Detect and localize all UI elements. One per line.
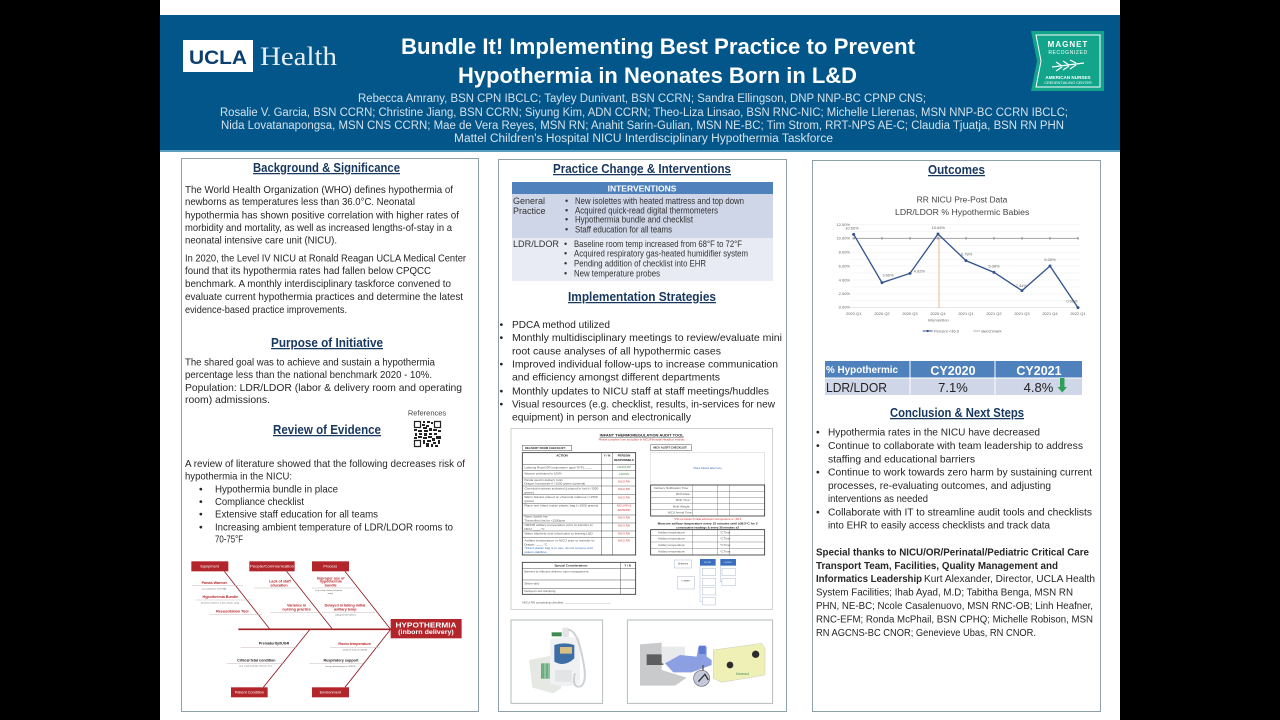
special considerations table: NICU RN completing checklist: ___________________________ — [522, 601, 611, 605]
header banner — [160, 15, 1120, 152]
chart legend: Percent <36.0 — [934, 328, 960, 333]
benchmark series — [853, 237, 1079, 239]
text: special thanks: PHN, NE-BC; Ncole Casalenuovo, MSN RNC-OB; Linh Heafner, — [816, 600, 1093, 612]
special considerations table: Delayed cord clamping: — [524, 589, 556, 593]
interventions table: Pending addition of checklist into EHR — [574, 258, 706, 268]
text: special thanks: Kurt Alexander, Director, UCLA Health — [924, 573, 1095, 585]
authors: Rosalie V. Garcia, BSN CCRN; Christine Jiang, BSN CCRN; Siyung Kim, ADN CCRN; Theo-Liza Linsao, BSN RNC-NIC; Michelle Llerenas, MSN NNP-BC CCRN IBCLC; — [220, 107, 1068, 119]
interventions table: Staff education for all teams — [575, 224, 672, 234]
heading: conclusion: Conclusion & Next Steps — [890, 406, 1024, 420]
text: special thanks: System Facilities; Ihab Ayad, M.D; Tabitha Benga, MSN RN — [816, 586, 1073, 598]
table: percent hypothermic: 7.1% — [938, 380, 968, 395]
special considerations table: Special Considerations — [554, 563, 588, 567]
QR code references — [408, 408, 446, 447]
interventions table: Practice — [513, 206, 546, 216]
text: review with bullets: Extensive staff education for all teams — [215, 508, 378, 520]
line chart — [836, 195, 1086, 333]
NICU admit checklist: Measure axillary temperature every 15 minutes until ≥36.5°C for 2 — [658, 521, 758, 525]
delivery room checklist: DELIVERY ROOM CHECKLIST: — [525, 446, 566, 450]
table: percent hypothermic — [825, 361, 1082, 395]
panel: left — [182, 158, 478, 712]
text: purpose: Population: LDR/LDOR (labor & delivery room and operating — [185, 382, 462, 394]
NICU admit checklist: °C — [720, 543, 724, 547]
chart legend — [923, 328, 1001, 333]
text: background paragraphs: morbidity and mortality, as well as increased lengths-of-stay in a — [185, 222, 452, 234]
delivery room checklist: Axillary temperature in NICU prior to transfer to — [524, 538, 595, 542]
delivery room checklist: *Infant plastic bag is in use; do not remove until — [524, 546, 593, 550]
text: purpose: percentage less than the national benchmark 2020 - 10%. — [185, 369, 432, 381]
badge: Magnet recognized — [1031, 31, 1104, 91]
fishbone causes: Critical fetal condition — [237, 659, 276, 663]
text: purpose: room) admissions. — [185, 394, 270, 406]
delivery room checklist: NICU RN — [618, 523, 630, 527]
text: strategies: Monthly updates to NICU staff at staff meetings/huddles — [512, 386, 769, 398]
delivery room checklist — [522, 445, 636, 555]
delivery room checklist: Warm double hat — [524, 515, 548, 519]
interventions table: • — [564, 258, 567, 268]
heading: review of evidence: Review of Evidence — [273, 423, 381, 437]
interventions table: • — [564, 268, 567, 278]
badge: Magnet recognized: AMERICAN NURSES — [1045, 75, 1091, 80]
photo: respiratory humidifier: Nomad — [736, 671, 749, 676]
interventions table: • — [565, 206, 568, 216]
audit tool form — [511, 428, 773, 609]
axis and data labels: 12.00% — [836, 222, 850, 227]
delivery room checklist: NICU RN — [618, 538, 630, 542]
percent series — [852, 232, 1079, 309]
fishbone causes: (e.g. cong anomaly, infection, etc.) — [239, 665, 272, 668]
text: conclusion bullets: • — [816, 440, 820, 452]
delivery room checklist: Thermoflect hat for <1500gms — [524, 519, 566, 523]
fishbone causes: bundle — [325, 584, 337, 588]
text: conclusion bullets: interventions as needed — [828, 493, 928, 505]
text: special thanks — [816, 546, 1095, 639]
NICU admit checklist: Time: — [724, 549, 731, 553]
fishbone category boxes: Process — [323, 565, 337, 569]
authors: Mattel Children's Hospital NICU Interdisciplinary Hypothermia Taskforce — [454, 133, 833, 145]
NICU admit checklist: °C — [720, 549, 724, 553]
title — [401, 34, 916, 88]
text: special thanks: Informatics Leadership — [816, 573, 922, 585]
axis and data labels: 2020 Q2 — [874, 311, 890, 316]
NICU admit checklist: consecutive readings & every 30 minutes x2 — [676, 525, 739, 529]
text: conclusion bullets: Continue to work towards zero harm by sustaining current — [828, 466, 1092, 478]
fishbone causes: Lack of staff — [269, 579, 292, 583]
badge: Magnet recognized: RECOGNIZED — [1048, 50, 1088, 56]
flow diagram — [674, 559, 736, 605]
text: strategies — [500, 319, 782, 424]
axis and data labels: 2021 Q3 — [1014, 311, 1030, 316]
delivery room checklist: Chemical mattress activated & placed in bed (<1500 — [524, 486, 599, 490]
authors: Rebecca Amrany, BSN CPN IBCLC; Tayley Dunivant, BSN CCRN; Sandra Ellingson, DNP NNP-BC CPNP CNS; — [358, 93, 926, 105]
delivery room checklist: Warm blankets over infant prior to leaving L&D — [524, 532, 594, 536]
text: review with bullets: 70-75°F — [215, 534, 243, 546]
interventions table: • — [565, 214, 568, 224]
fishbone causes: Prematurity/IUGR — [259, 642, 290, 646]
text: review with bullets: Increasing ambient temperature of LDR/LDOR rooms to — [215, 522, 453, 534]
delivery room checklist: NICU RN & — [617, 504, 631, 508]
fishbone causes: wrap) — [328, 592, 333, 595]
NICU admit checklist: Axillary temperature: — [658, 537, 685, 541]
heading: practice change: Practice Change & Interventions — [553, 162, 731, 176]
logo: UCLA Health — [183, 40, 337, 72]
text: conclusion bullets — [816, 426, 1092, 532]
text: strategies: • — [500, 398, 504, 410]
text: purpose — [185, 356, 462, 406]
text: background paragraphs: neonatal intensive care unit (NICU). — [185, 234, 337, 246]
delivery room checklist: LAD/OLRP — [617, 465, 631, 469]
special considerations table: Shiver-dist: — [524, 581, 540, 585]
axis and data labels: 6.78% — [961, 252, 973, 257]
logo: UCLA Health: Health — [260, 42, 337, 71]
delivery room checklist: NICU RN — [618, 532, 630, 536]
text: purpose: The shared goal was to achieve and sustain a hypothermia — [185, 356, 435, 368]
text: strategies: Monthly multidisciplinary meetings to review/evaluate mini — [512, 332, 782, 344]
fishbone causes: Variance in — [287, 604, 306, 608]
NICU admit checklist: Birth Date: — [676, 492, 691, 496]
delivery room checklist: RD/SNNP — [618, 508, 630, 512]
special considerations table — [522, 562, 636, 605]
interventions table: • — [565, 196, 568, 206]
fishbone causes: (using unheated gas in OR/DR) — [325, 665, 356, 668]
fishbone effect box: HYPOTHERMIA — [395, 622, 456, 629]
fishbone causes: (e.g. early removal of plastic — [316, 589, 343, 592]
fishbone category boxes: Patient Condition — [235, 691, 264, 695]
delivery room checklist: Panda used in delivery room — [524, 478, 563, 482]
interventions table: • — [564, 248, 567, 258]
text: review with bullets: Compliance checklist — [215, 496, 304, 508]
text: background paragraphs: benchmark. A monthly interdisciplinary taskforce convened to — [185, 278, 451, 290]
photo: digital thermometer — [511, 620, 603, 703]
flow diagram: If INFANT — [682, 580, 691, 583]
NICU admit checklist: Axillary temperature: — [658, 531, 685, 535]
axis and data labels — [836, 222, 1086, 322]
axis and data labels: 0.00% — [1066, 298, 1078, 303]
axis and data labels: 5.08% — [988, 263, 1000, 268]
heading: outcomes: Outcomes — [928, 163, 985, 177]
axis and data labels: 2020 Q3 — [902, 311, 918, 316]
NICU admit checklist: °C — [720, 537, 724, 541]
flow diagram: Deliveries — [678, 563, 689, 566]
NICU admit checklist: Time: — [724, 537, 731, 541]
NICU admit checklist: NICU ALERT CHECKLIST: — [653, 446, 687, 450]
delivery room checklist: Laboring Room/OR temperature (goal 75°F): ____ — [524, 465, 593, 469]
text: conclusion bullets: staffing and educational barriers — [828, 454, 975, 466]
axis and data labels: 4.00% — [839, 277, 850, 282]
text: strategies: • — [500, 358, 504, 370]
badge: Magnet recognized: MAGNET — [1048, 40, 1088, 49]
delivery room checklist: NICU RN — [618, 515, 630, 519]
axis and data labels: 10.00% — [836, 236, 850, 241]
interventions table: Acquired quick-read digital thermometers — [575, 206, 718, 216]
fishbone causes: Respiratory support — [324, 659, 359, 663]
fishbone causes: Resuscitation Tool — [216, 610, 249, 614]
fishbone causes: (chemical mattress, 2 hats, plastic wrap) — [201, 601, 240, 604]
heading: implementation strategies: Implementation Strategies — [568, 290, 716, 304]
axis and data labels: 0.00% — [839, 305, 850, 310]
axis and data labels: 3.60% — [882, 273, 894, 278]
axis and data labels: 8.00% — [839, 250, 850, 255]
text: special thanks: Transport Team, Facilities, Quality Management and — [816, 560, 1058, 572]
text: strategies: equipment) in person and electronically — [512, 412, 692, 424]
fishbone causes: (in comparison to NOVA) — [202, 588, 227, 591]
text: special thanks: RN AGCNS-BC CNOR; Genevieve Ubas, RN CNOR. — [816, 627, 1036, 639]
NICU admit checklist: Axillary temperature: — [658, 549, 685, 553]
NICU admit checklist — [651, 445, 765, 555]
delivery room checklist: Y / N — [604, 453, 610, 457]
text: conclusion bullets: • — [816, 506, 820, 518]
panel: middle — [498, 160, 786, 712]
text: review with bullets: • — [199, 508, 203, 520]
delivery room checklist: Dragon: ____ °C — [524, 542, 548, 546]
delivery room checklist: NICU RN — [618, 487, 630, 491]
NICU admit checklist: *Fill out below if initial admission temperature is <36.5 — [674, 517, 742, 521]
fishbone causes: Hypothermia Bundle — [202, 595, 238, 599]
text: strategies: Improved individual follow-ups to increase communication — [512, 358, 778, 370]
interventions table: Hypothermia bundle and checklist — [575, 214, 693, 224]
NICU admit checklist: Axillary temperature: — [658, 543, 685, 547]
text: strategies: • — [500, 386, 504, 398]
fishbone causes: Room temperature — [338, 642, 371, 646]
delivery room checklist: NICU RN — [618, 480, 630, 484]
fishbone causes: Improper use of — [317, 577, 345, 581]
delivery room checklist: Warmer preheated to 100% — [524, 472, 562, 476]
axis and data labels: 2.00% — [839, 291, 850, 296]
text: review with bullets: Hypothermia bundle in place — [215, 484, 338, 496]
fishbone category boxes: Environment — [320, 691, 342, 695]
fishbone causes: (delayed thermoflect) — [336, 614, 356, 617]
axis and data labels: 2022 Q1 — [1070, 311, 1086, 316]
text: background paragraphs — [185, 184, 466, 316]
NICU admit checklist: Time: — [724, 543, 731, 547]
fishbone effect box — [391, 619, 462, 638]
axis and data labels: 6.00% — [839, 263, 850, 268]
QR code references: References — [408, 408, 446, 418]
axis and data labels: 2021 Q4 — [1042, 311, 1058, 316]
text: strategies: Visual resources (e.g. checklist, results, in-services for new — [512, 398, 775, 410]
text: strategies: PDCA method utilized — [512, 319, 610, 331]
flow diagram: FLOOD — [725, 562, 732, 564]
text: background paragraphs: The World Health Organization (WHO) defines hypothermia of — [185, 184, 453, 196]
badge: Magnet recognized: CREDENTIALING CENTER — [1044, 81, 1092, 85]
NICU admit checklist: Delivery Notification Time: — [654, 486, 689, 490]
delivery room checklist: ACTION — [556, 453, 568, 457]
photo: respiratory humidifier — [627, 620, 773, 703]
interventions table: Baseline room temp increased from 68°F to 72°F — [574, 239, 742, 249]
text: conclusion bullets: • — [816, 426, 820, 438]
interventions table: • — [564, 239, 567, 249]
delivery room checklist: LAD/RN — [619, 472, 629, 476]
panel: right — [812, 160, 1100, 712]
delivery room checklist: patient stabilizes — [524, 550, 547, 554]
NICU admit checklist: NICU Arrival Time: — [668, 510, 692, 514]
fishbone diagram — [191, 561, 462, 697]
text: special thanks: RNC-EFM; Ronda McPhail, BSN CPHQ; Michelle Robison, MSN — [816, 614, 1093, 626]
line chart: LDR/LDOR % Hypothermic Babies — [895, 207, 1029, 217]
text: conclusion bullets: processes, re-evaluating outcomes, and adjusting — [828, 480, 1051, 492]
delivery room checklist: Dragon Incorporate if >1000 grams (optional) — [524, 482, 585, 486]
heading: purpose of initiative: Purpose of Initiative — [271, 336, 383, 350]
text: conclusion bullets: Collaborate with IT to streamline audit tools and checklists — [828, 506, 1092, 518]
text: review with bullets: • — [199, 496, 203, 508]
heading: background and significance: Background & Significance — [253, 161, 400, 175]
text: strategies: root cause analyses of all hypothermic cases — [512, 346, 721, 358]
fishbone causes: education — [270, 583, 288, 587]
authors — [220, 93, 1068, 145]
text: review with bullets: • — [199, 484, 203, 496]
interventions table: LDR/LDOR — [513, 239, 559, 249]
text: background paragraphs: newborns as temperatures less than 36.0°C. Neonatal — [185, 196, 415, 208]
delivery room checklist: PERSON — [618, 453, 630, 457]
chart legend: Benchmark — [981, 328, 1001, 333]
NICU admit checklist: Birth Weight: — [673, 504, 690, 508]
axis and data labels: 2020 Q1 — [846, 311, 862, 316]
text: conclusion bullets: Continue to collaborate with team leadership to address — [828, 440, 1083, 452]
axis and data labels: Intervention — [928, 317, 949, 322]
flow diagram: FLOOD — [704, 562, 712, 564]
title: Bundle It! Implementing Best Practice to Prevent — [401, 34, 916, 59]
fishbone causes: hypothermia — [320, 580, 343, 584]
text: background paragraphs: evaluate current hypothermia practices and determine the latest — [185, 291, 463, 303]
table: percent hypothermic: % Hypothermic — [826, 364, 898, 376]
icon: green down arrow — [1058, 378, 1067, 392]
audit tool form: Please complete form and place in NICU/Neonatal Headbox medvac — [599, 438, 685, 442]
axis and data labels: 2020 Q4 — [930, 311, 946, 316]
audit tool form: INFANT THERMOREGULATION AUDIT TOOL — [600, 434, 684, 438]
axis and data labels: 2021 Q2 — [986, 311, 1002, 316]
delivery room checklist: grams) — [524, 499, 534, 503]
interventions table: Acquired respiratory gas-heated humidifier system — [574, 248, 748, 258]
fishbone causes: Panda Warmer — [202, 581, 228, 585]
table: percent hypothermic: CY2021 — [1016, 364, 1062, 378]
interventions table: New temperature probes — [574, 268, 660, 278]
interventions table — [512, 182, 773, 281]
axis and data labels: 4.92% — [914, 268, 925, 273]
authors: Nida Lovatanapongsa, MSN CNS CCRN; Mae de Vera Reyes, MSN RN; Anahit Sarin-Gulian, MSN NE-BC; Tim Strom, RRT-NPS AE-C; Claudia Tjuatja, BSN RN PHN — [221, 120, 1064, 132]
logo: UCLA Health: UCLA — [189, 48, 247, 69]
fishbone causes — [201, 577, 371, 668]
text: conclusion bullets: Hypothermia rates in the NICU have decreased — [828, 426, 1040, 438]
special considerations table: Barriers to effective delivery room management: — [524, 570, 589, 574]
delivery room checklist: NICU: ____ °C — [524, 527, 545, 531]
fishbone category boxes — [191, 561, 349, 697]
delivery room checklist: Place wet infant inside plastic bag (<1500 grams) — [524, 503, 598, 507]
axis and data labels: 10.64% — [932, 225, 946, 230]
NICU admit checklist: Birth Time: — [676, 498, 691, 502]
intervention marker — [937, 234, 940, 308]
line chart: RR NICU Pre-Post Data — [917, 195, 1008, 205]
fishbone causes: nursing practice — [282, 608, 311, 612]
table: percent hypothermic: 4.8% — [1024, 380, 1054, 395]
interventions table: INTERVENTIONS — [608, 184, 677, 194]
text: review with bullets: hypothermia in the NICU: — [185, 470, 292, 482]
axis and data labels: 2021 Q1 — [958, 311, 974, 316]
delivery room checklist: Warm blanket placed on chemical mattress (>1500 — [524, 495, 598, 499]
text: strategies: • — [500, 332, 504, 344]
table: percent hypothermic: CY2020 — [930, 364, 976, 378]
text: review with bullets: A review of literature showed that the following decreases risk of — [185, 458, 465, 470]
interventions table: • — [565, 224, 568, 234]
NICU admit checklist: Time: — [724, 531, 731, 535]
text: strategies: and efficiency amongst different departments — [512, 372, 720, 384]
delivery room checklist: NICU RN — [618, 495, 630, 499]
fishbone causes: Delayed in taking initial — [325, 603, 365, 607]
NICU admit checklist: Place Patient label here — [694, 466, 722, 470]
table: percent hypothermic: LDR/LDOR — [826, 380, 887, 395]
delivery room checklist: OR/DR axillary temperature prior to transfer to — [524, 523, 593, 527]
fishbone causes: axillary temp — [334, 607, 357, 611]
text: background paragraphs: evidence-based practice improvements. — [185, 304, 347, 316]
interventions table: New isolettes with heated mattress and top down — [575, 196, 744, 206]
text: background paragraphs: In 2020, the Level IV NICU at Ronald Reagan UCLA Medical Center — [185, 252, 466, 264]
fishbone category boxes: People/Communication — [250, 565, 294, 569]
interventions table: General — [513, 196, 545, 206]
fishbone category boxes: Equipment — [201, 565, 220, 569]
delivery room checklist: RESPONSIBLE — [614, 458, 634, 462]
axis and data labels: 10.60% — [845, 225, 859, 230]
fishbone effect box: (inborn delivery) — [398, 630, 454, 636]
delivery room checklist: grams) — [524, 490, 534, 494]
axis and data labels: 2.44% — [1016, 283, 1027, 288]
special considerations table: Y / N — [624, 563, 631, 567]
fishbone causes: (ambient temp of OR/DR) — [343, 649, 367, 652]
text: background paragraphs: hypothermia has shown positive correlation with higher rates of — [185, 210, 459, 222]
NICU admit checklist: °C — [720, 531, 724, 535]
text: conclusion bullets: • — [816, 466, 820, 478]
text: review with bullets — [185, 458, 465, 546]
text: review with bullets: • — [199, 522, 203, 534]
text: conclusion bullets: into EHR to easily access checklists and track data — [828, 520, 1050, 532]
text: special thanks: Special thanks to NICU/OR/Perinatal/Pediatric Critical Care — [816, 546, 1089, 558]
axis and data labels: 6.00% — [1044, 257, 1056, 262]
text: background paragraphs: found that its hypothermia rates had fallen below CPQCC — [185, 265, 431, 277]
title: Hypothermia in Neonates Born in L&D — [458, 63, 857, 88]
text: strategies: • — [500, 319, 504, 331]
